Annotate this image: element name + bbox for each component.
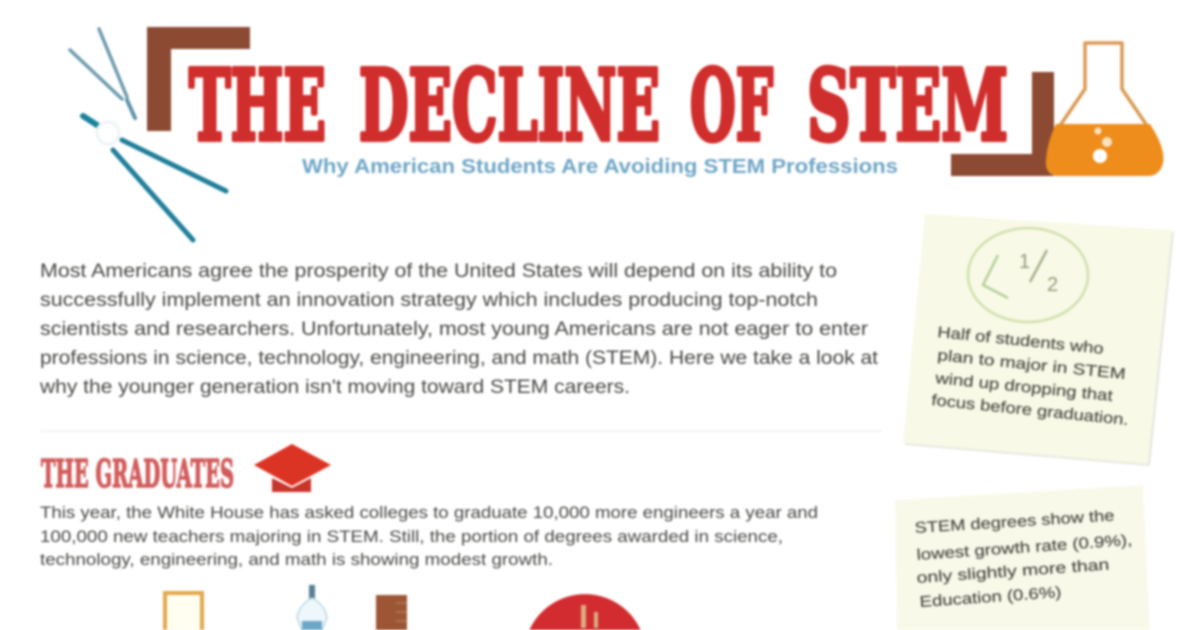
note text — [914, 507, 1133, 611]
graduates text block: technology, engineering, and math is showing modest growth. — [40, 551, 553, 569]
intro text block: scientists and researchers. Unfortunately, most young Americans are not eager to enter — [40, 319, 869, 340]
icon: blue bottle — [297, 585, 327, 630]
note text: lowest growth rate (0.9%), — [916, 532, 1133, 564]
graduates text block — [40, 504, 818, 569]
icon: graduation cap — [254, 444, 331, 492]
intro text block: professions in science, technology, engineering, and math (STEM). Here we take a look at — [40, 348, 879, 369]
intro text block: successfully implement an innovation strategy which includes producing top-notch — [40, 290, 818, 311]
graduates text block: 100,000 new teachers majoring in STEM. Still, the portion of degrees awarded in science, — [40, 528, 783, 546]
title — [189, 48, 1008, 162]
intro text block: Most Americans agree the prosperity of the United States will depend on its ability to — [40, 261, 837, 282]
sticky note: half of students — [903, 214, 1174, 466]
icon: drafting compass — [70, 29, 226, 240]
intro text block — [39, 261, 879, 398]
intro text block: why the younger generation isn't moving toward STEM careers. — [39, 377, 630, 398]
section heading: the graduates: THE GRADUATES — [41, 451, 234, 496]
icon: brown bottom-right bracket — [951, 72, 1054, 176]
subtitle: Why American Students Are Avoiding STEM Professions — [302, 156, 898, 178]
title: OF — [690, 48, 773, 162]
title: DECLINE — [359, 48, 660, 162]
note text: only slightly more than — [916, 557, 1110, 587]
icon: chemistry flask — [1046, 43, 1163, 176]
note text: Half of students who — [937, 324, 1104, 358]
icon: brown top-left bracket — [147, 27, 250, 131]
icon: less than one half circle — [968, 228, 1088, 322]
icon: less than one half circle: 2 — [1047, 274, 1058, 296]
sticky note: growth rate — [895, 485, 1150, 630]
icon: less than one half circle: 1 — [1019, 251, 1030, 273]
graduates text block: This year, the White House has asked colleges to graduate 10,000 more engineers a year and — [40, 504, 818, 522]
note text: STEM degrees show the — [914, 507, 1115, 537]
note text: Education (0.6%) — [919, 584, 1062, 611]
note text: wind up dropping that — [933, 370, 1114, 405]
note text: plan to major in STEM — [937, 347, 1126, 383]
title: STEM — [807, 48, 1008, 162]
title: THE — [189, 48, 326, 162]
icon: red circle with figure — [529, 594, 641, 630]
icon: yellow flask neck — [165, 593, 202, 630]
icon: brown ruler — [376, 595, 407, 630]
note text: focus before graduation. — [931, 392, 1129, 429]
note text — [931, 324, 1129, 429]
